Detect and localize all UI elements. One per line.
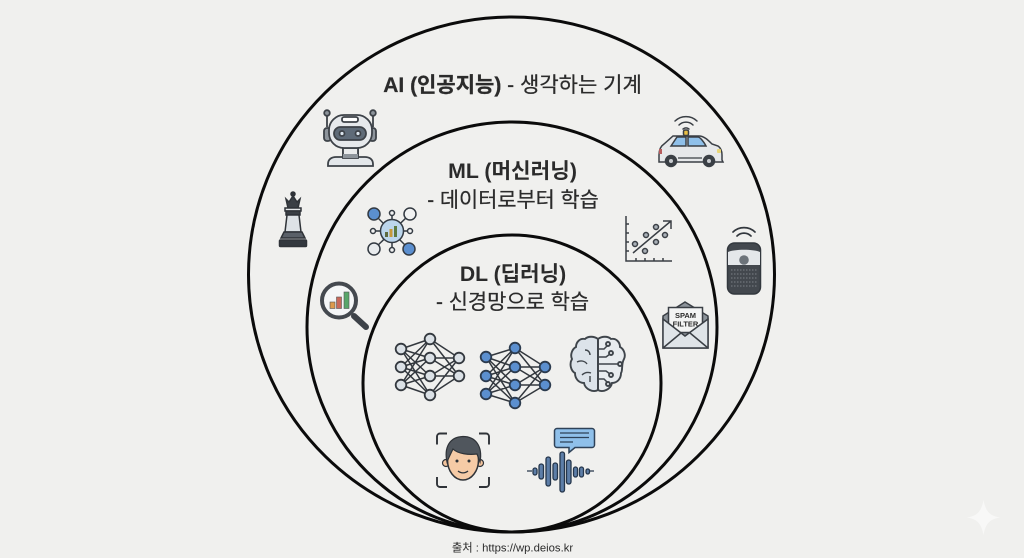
circle: DL inner [363, 235, 661, 532]
text: ML description: - 데이터로부터 학습 [427, 189, 599, 212]
icon: speech waveform [527, 428, 594, 492]
icon: scatter plot [626, 216, 672, 261]
circle: AI outer [248, 17, 774, 532]
circle: ML middle [307, 122, 717, 532]
icon: spam filter envelope: FILTER [673, 320, 699, 328]
icon: self-driving car [659, 117, 723, 166]
sound bars [533, 452, 590, 492]
icon: robot [324, 110, 376, 166]
icon: face recognition [437, 434, 489, 487]
speech bubble [554, 428, 594, 452]
icon: magnifier with bar chart [322, 284, 366, 327]
icon: chess king [280, 192, 306, 246]
text: DL description: - 신경망으로 학습 [436, 291, 589, 314]
icon: grey neural network [396, 334, 464, 400]
icon: data network [368, 208, 416, 255]
icon: spam filter envelope: SPAM [675, 311, 696, 320]
source credit: 출처 : https://wp.deios.kr [452, 542, 573, 554]
icon: smart speaker [728, 228, 760, 294]
heading: DL: DL (딥러닝) [460, 262, 566, 286]
heading: AI: AI (인공지능) - 생각하는 기계 [383, 74, 642, 97]
heading: ML: ML (머신러닝) [448, 159, 577, 183]
icon: sparkle watermark [967, 500, 1000, 535]
icon: spam filter envelope [663, 302, 708, 348]
icon: brain circuit [571, 337, 625, 391]
icon: blue neural network [481, 343, 550, 408]
